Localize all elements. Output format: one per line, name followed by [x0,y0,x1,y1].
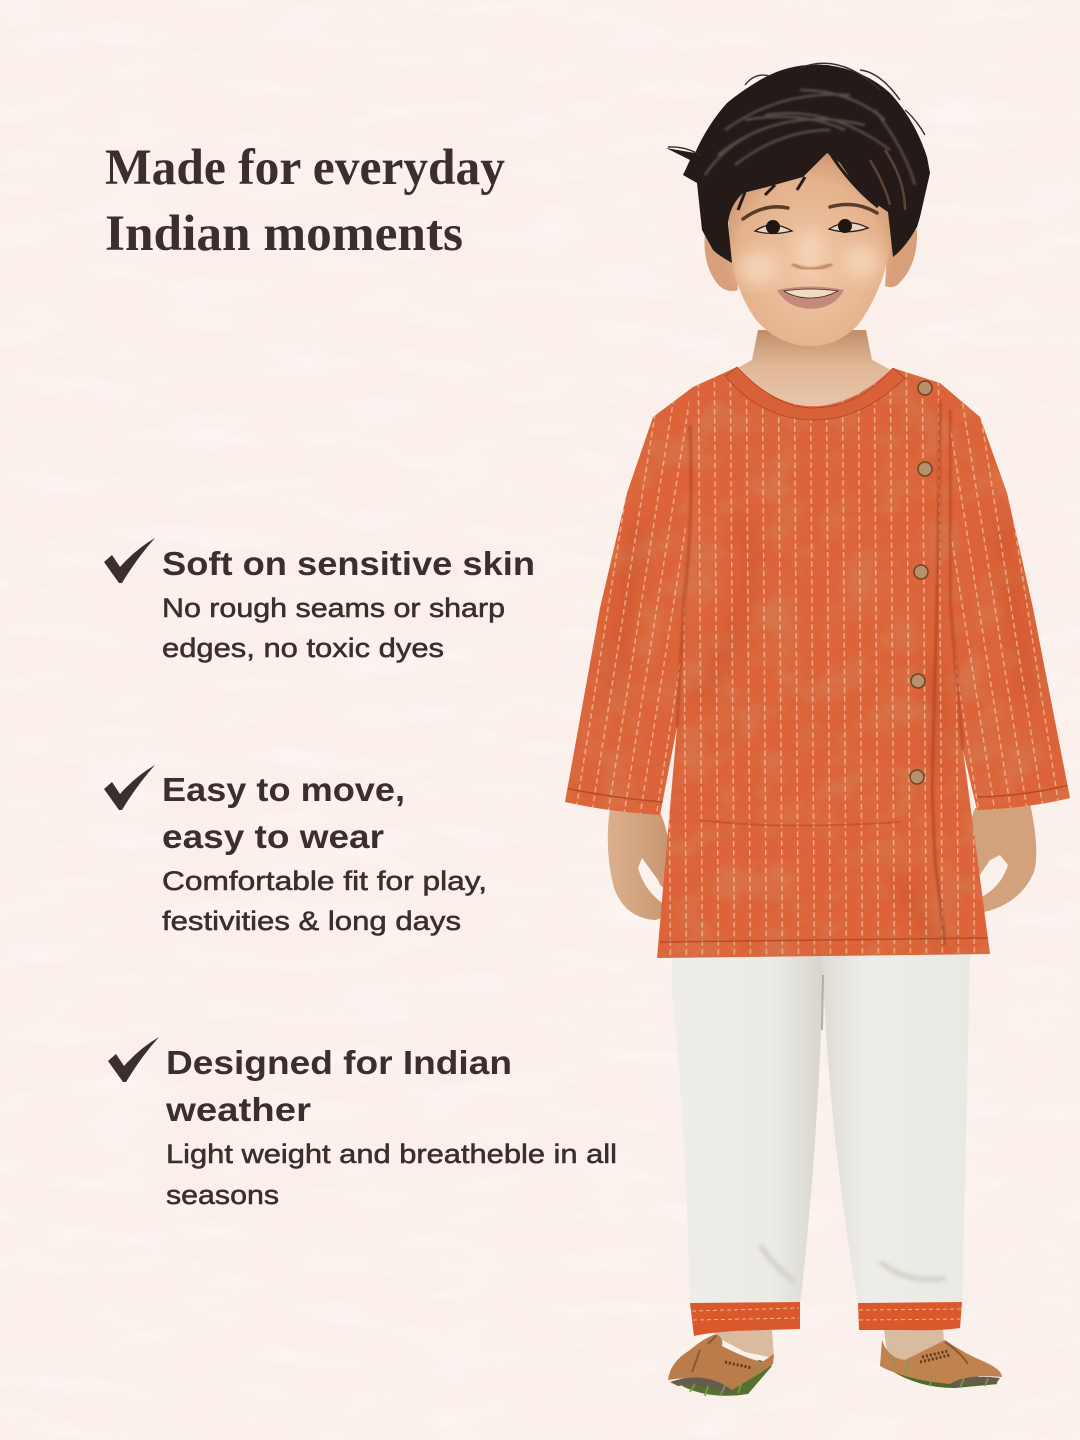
face [728,150,894,346]
title [105,140,505,262]
ears [704,230,917,291]
right hand [961,803,1036,913]
icon: check mark [104,765,155,810]
buttons [910,381,932,784]
heading: easy to move, easy to wear: easy to wear [162,818,384,855]
kurta with sleeves [560,360,1075,970]
eyebrows [743,205,877,219]
mouth smile [777,286,844,309]
description: easy to move [162,866,487,936]
collar [725,367,905,420]
heading: designed for Indian weather: weather [165,1091,311,1128]
description: easy to move: Comfortable fit for play, [162,866,487,896]
description: designed for Indian weather: Light weight and breatheble in all [166,1139,617,1169]
title: Made for everyday [105,140,505,196]
description: easy to move: festivities & long days [162,906,461,936]
eyes [755,219,868,234]
description: designed for Indian weather [166,1139,617,1210]
trousers [672,945,970,1306]
trouser cuffs [690,1302,962,1336]
left hand [608,808,672,920]
heading: designed for Indian weather [165,1044,512,1128]
description: soft on sensitive skin: edges, no toxic dyes [162,633,444,663]
icon: check mark [108,1037,159,1082]
benefit: easy to move, easy to wear [104,765,487,936]
title: Indian moments [105,206,463,262]
description: soft on sensitive skin [162,593,505,663]
illustration: smiling child in orange kurta [560,63,1075,1396]
icon: check mark [104,538,155,583]
hair [666,63,930,263]
neck [730,330,895,412]
description: designed for Indian weather: seasons [166,1180,279,1210]
description: soft on sensitive skin: No rough seams or sharp [162,593,505,623]
nose [792,264,832,269]
heading: easy to move, easy to wear [162,771,405,855]
heading: designed for Indian weather: Designed for Indian [166,1044,512,1081]
benefit: soft on sensitive skin [104,538,535,663]
shoes and grass [668,1328,1002,1396]
heading: soft on sensitive skin: Soft on sensitive skin [162,545,535,582]
cheek highlights [738,230,880,286]
benefit: designed for Indian weather [108,1037,617,1210]
heading: easy to move, easy to wear: Easy to move, [162,771,405,808]
